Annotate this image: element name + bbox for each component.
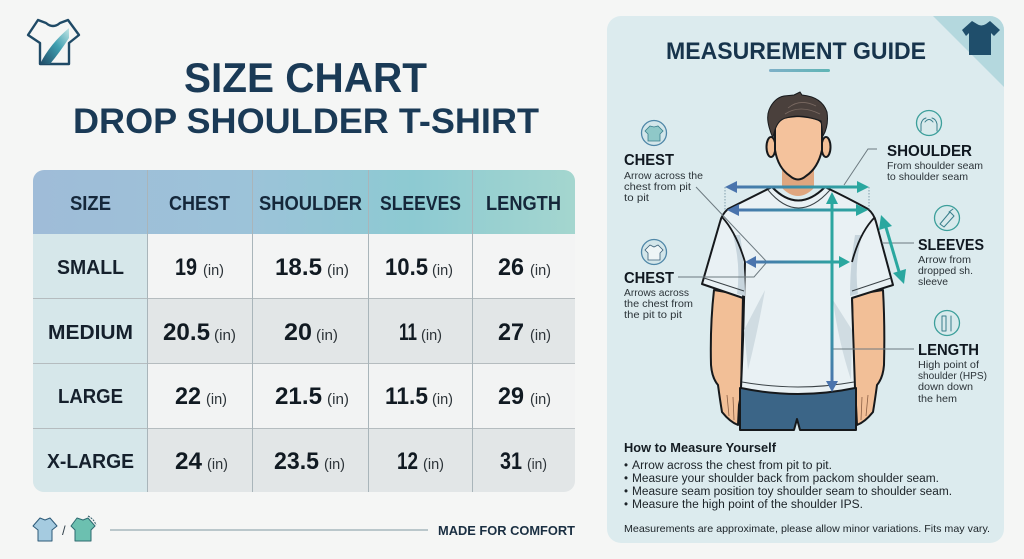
callout: chest lower: CHEST bbox=[624, 270, 674, 287]
callout: shoulder bbox=[887, 110, 983, 183]
size table bbox=[33, 170, 575, 492]
row: large: LARGE bbox=[58, 386, 123, 408]
leader lines bbox=[678, 149, 914, 349]
row: small: (in) bbox=[530, 262, 551, 279]
callout: chest top: chest from pit bbox=[624, 181, 691, 193]
row: x-large: (in) bbox=[527, 456, 547, 473]
row: small: 19 bbox=[175, 254, 197, 281]
title bbox=[73, 54, 539, 141]
row: large: 21.5 bbox=[275, 383, 322, 410]
row: small: SMALL bbox=[57, 257, 124, 279]
table header row bbox=[33, 170, 575, 234]
row: small: 26 bbox=[498, 254, 524, 281]
footer tagline: MADE FOR COMFORT bbox=[438, 523, 575, 538]
footer icons: blue and teal tees bbox=[33, 516, 96, 541]
row: small: (in) bbox=[432, 262, 453, 279]
how to measure instructions: Measure seam position toy shoulder seam to shoulder seam. bbox=[632, 486, 952, 498]
head: ears, face and hair bbox=[766, 92, 830, 180]
arrow: body length bbox=[826, 192, 838, 392]
table header row: LENGTH bbox=[486, 193, 561, 215]
callout: chest lower: the pit to pit bbox=[624, 309, 682, 321]
row: x-large: 12 bbox=[397, 448, 418, 475]
row: medium: (in) bbox=[316, 327, 338, 344]
callout: chest top: to pit bbox=[624, 192, 649, 204]
row: small bbox=[58, 258, 550, 278]
row: small: (in) bbox=[203, 262, 224, 279]
row: large: (in) bbox=[530, 391, 551, 408]
neck bbox=[782, 170, 814, 196]
row: medium: 27 bbox=[498, 319, 524, 346]
row: large: 22 bbox=[175, 383, 201, 410]
how to measure instructions: Measure your shoulder back from packom shoulder seam. bbox=[632, 473, 939, 485]
callout: shoulder: to shoulder seam bbox=[887, 171, 968, 183]
callout: sleeves: Arrow from bbox=[918, 254, 971, 266]
callout: sleeves bbox=[918, 206, 984, 288]
row: x-large: (in) bbox=[423, 456, 444, 473]
callout: chest lower: Arrows across bbox=[624, 287, 689, 299]
row: large: 29 bbox=[498, 383, 524, 410]
logo: t-shirt icon bbox=[28, 20, 79, 64]
row: x-large bbox=[47, 452, 546, 472]
callout: chest top bbox=[624, 120, 703, 204]
callout: length: shoulder (HPS) bbox=[918, 370, 987, 382]
arrow: sleeve bbox=[879, 215, 906, 284]
row: x-large: 31 bbox=[500, 448, 522, 475]
title: DROP SHOULDER T-SHIRT bbox=[73, 102, 539, 141]
row backgrounds bbox=[33, 170, 575, 492]
how to measure instructions: • bbox=[624, 473, 628, 485]
row: medium: MEDIUM bbox=[48, 322, 133, 344]
row: large: (in) bbox=[206, 391, 227, 408]
how to measure instructions: • bbox=[624, 499, 628, 511]
callout: length bbox=[918, 310, 987, 405]
how to measure instructions: How to Measure Yourself bbox=[624, 440, 777, 455]
pants bbox=[740, 388, 856, 430]
callout: shoulder: SHOULDER bbox=[887, 143, 972, 160]
row: medium: 20.5 bbox=[163, 319, 210, 346]
panel: measurement guide bbox=[607, 16, 1004, 543]
corner ribbon with shirt icon bbox=[933, 16, 1004, 87]
callout: length: LENGTH bbox=[918, 342, 979, 359]
callout: chest top: CHEST bbox=[624, 152, 674, 169]
figure: man in t-shirt bbox=[702, 92, 893, 430]
callout: sleeves: sleeve bbox=[918, 276, 948, 288]
panel heading: MEASUREMENT GUIDE bbox=[666, 38, 926, 65]
icon: chest outline tee bbox=[642, 240, 666, 264]
row: medium: (in) bbox=[530, 327, 551, 344]
how to measure instructions: • bbox=[624, 486, 628, 498]
row: large: 11.5 bbox=[385, 383, 428, 410]
row: small: 10.5 bbox=[385, 254, 428, 281]
row: x-large: (in) bbox=[324, 456, 345, 473]
callout: shoulder: From shoulder seam bbox=[887, 160, 983, 172]
how to measure instructions bbox=[624, 440, 952, 511]
row: medium: 11 bbox=[399, 319, 417, 346]
row: large: (in) bbox=[432, 391, 453, 408]
title: SIZE CHART bbox=[184, 54, 427, 101]
arms bbox=[711, 290, 884, 425]
table header row: SHOULDER bbox=[259, 193, 363, 215]
arrow: chest pit to pit bbox=[745, 256, 850, 268]
table header row: SIZE bbox=[70, 193, 111, 215]
row: large bbox=[59, 387, 550, 407]
t-shirt bbox=[702, 187, 893, 394]
row: medium bbox=[49, 323, 550, 343]
callout: length: down down bbox=[918, 381, 973, 393]
callout: chest lower bbox=[624, 240, 693, 321]
icon: length bbox=[934, 310, 960, 336]
callout: length: the hem bbox=[918, 393, 957, 405]
footer icons: blue and teal tees: / bbox=[62, 523, 66, 538]
callout: length: High point of bbox=[918, 359, 979, 371]
callout: chest lower: the chest from bbox=[624, 298, 693, 310]
row: small: 18.5 bbox=[275, 254, 322, 281]
icon: chest tee bbox=[642, 120, 666, 146]
callout: sleeves: dropped sh. bbox=[918, 265, 973, 277]
callout: sleeves: SLEEVES bbox=[918, 237, 984, 254]
row: x-large: (in) bbox=[207, 456, 228, 473]
row: x-large: 23.5 bbox=[274, 448, 319, 475]
icon: shoulder bbox=[916, 110, 942, 136]
arrow: upper chest bbox=[727, 204, 868, 216]
row: medium: 20 bbox=[284, 319, 312, 346]
row: medium: (in) bbox=[214, 327, 236, 344]
disclaimer note: Measurements are approximate, please allow minor variations. Fits may vary. bbox=[624, 523, 990, 535]
how to measure instructions: Arrow across the chest from pit to pit. bbox=[632, 460, 832, 472]
table header row: SLEEVES bbox=[380, 193, 461, 215]
row: large: (in) bbox=[327, 391, 349, 408]
how to measure instructions: Measure the high point of the shoulder IPS. bbox=[632, 499, 863, 511]
arrow: shoulder width bbox=[725, 181, 869, 193]
table header row: CHEST bbox=[169, 193, 230, 215]
row: x-large: X-LARGE bbox=[47, 451, 134, 473]
icon: sleeve bbox=[934, 206, 960, 230]
row: x-large: 24 bbox=[175, 448, 203, 475]
row: medium: (in) bbox=[421, 327, 442, 344]
row: small: (in) bbox=[327, 262, 349, 279]
callout: chest top: Arrow across the bbox=[624, 170, 703, 182]
how to measure instructions: • bbox=[624, 460, 628, 472]
